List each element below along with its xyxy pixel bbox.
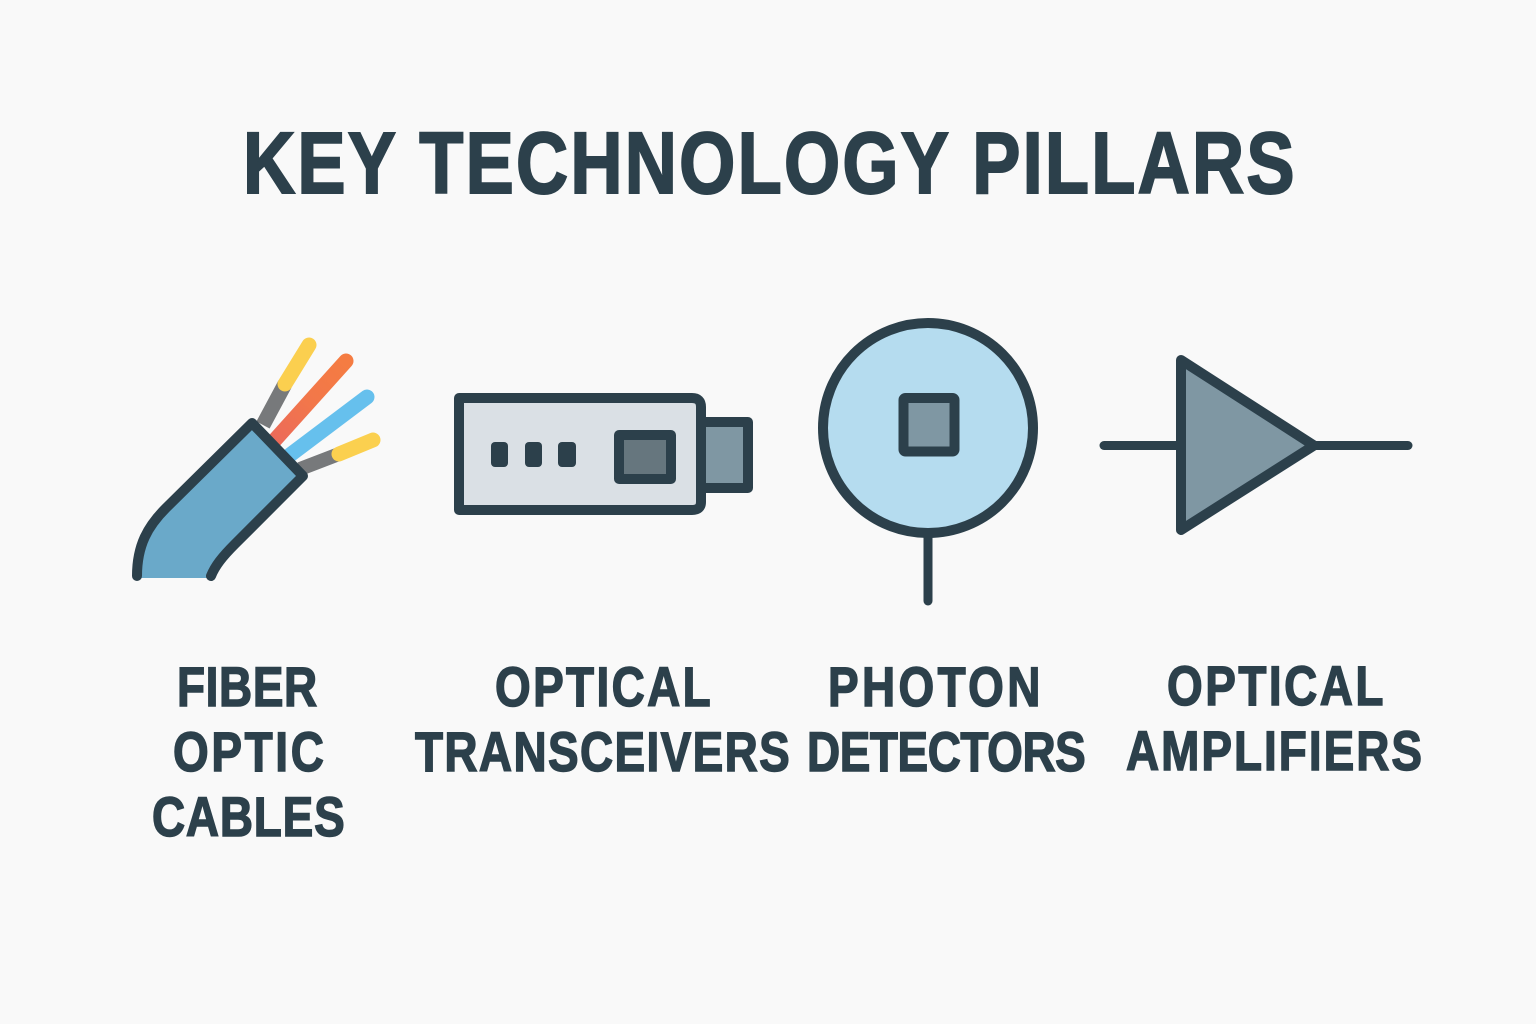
label: optical transceivers <box>415 656 790 783</box>
label: optical transceivers: TRANSCEIVERS <box>415 721 790 783</box>
pillar: optical amplifiers <box>1104 360 1422 782</box>
label: optical amplifiers <box>1126 655 1422 782</box>
label: fiber optic cables: OPTIC <box>173 721 324 783</box>
label: fiber optic cables: FIBER <box>177 656 317 718</box>
label: fiber optic cables: CABLES <box>152 786 345 848</box>
label: optical amplifiers: OPTICAL <box>1167 655 1383 717</box>
label: photon detectors <box>807 656 1086 783</box>
icon: amplifier symbol <box>1104 360 1408 530</box>
label: photon detectors: PHOTON <box>828 656 1040 718</box>
label: optical transceivers: OPTICAL <box>495 656 711 718</box>
pillar: optical transceivers <box>415 398 790 783</box>
title: KEY TECHNOLOGY PILLARS <box>243 115 1295 211</box>
pillar: fiber optic cables <box>137 345 373 848</box>
label: fiber optic cables <box>152 656 345 848</box>
label: photon detectors: DETECTORS <box>807 721 1086 783</box>
icon: photon detector <box>823 323 1033 601</box>
icon: transceiver module <box>459 398 748 510</box>
label: optical amplifiers: AMPLIFIERS <box>1126 720 1422 782</box>
icon: fiber optic cable <box>137 345 373 578</box>
pillar: photon detectors <box>807 323 1086 783</box>
